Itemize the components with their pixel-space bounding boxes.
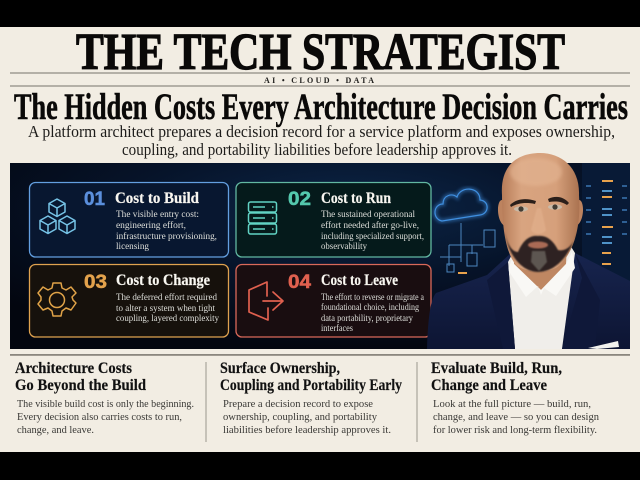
card title: Cost to Run (321, 190, 391, 207)
card text: foundational choice, including (321, 302, 419, 313)
network diagram (440, 223, 495, 272)
card title: Cost to Build (115, 190, 199, 207)
number 02: 02 (288, 189, 311, 210)
card text: licensing (116, 242, 149, 252)
ears (498, 200, 583, 226)
card: cost to run (236, 182, 431, 257)
server racks (458, 163, 630, 288)
card text: The sustained operational (321, 210, 415, 220)
masthead (10, 24, 630, 86)
card text: The visible entry cost: (116, 210, 199, 220)
suit jacket (427, 253, 630, 349)
card text: data portability, proprietary (321, 314, 413, 324)
icon: cubes (40, 199, 75, 234)
scalp highlight (510, 158, 562, 186)
pocket square (588, 341, 619, 349)
card text: infrastructure provisioning, (116, 231, 217, 242)
rule under panel (10, 354, 630, 356)
column heading: Go Beyond the Build (15, 377, 146, 394)
card text: effort needed after go-live, (321, 220, 419, 231)
column text: liabilities before leadership approves it. (223, 424, 391, 436)
column heading: Architecture Costs (15, 360, 132, 377)
card text (116, 210, 217, 252)
subtitle: A platform architect prepares a decision record for a service platform and exposes ownership, (28, 122, 615, 141)
column heading: Coupling and Portability Early (220, 377, 402, 394)
card text: engineering effort, (116, 220, 186, 231)
shirt collar (508, 252, 575, 297)
head (502, 153, 579, 272)
card text: to alter a system when tight (116, 304, 215, 314)
card text: interfaces (321, 323, 353, 334)
card text: The effort to reverse or migrate a (321, 292, 425, 303)
column text: Look at the full picture — build, run, (433, 398, 591, 410)
portrait: bald bearded man in navy suit (427, 153, 630, 349)
subtitle: coupling, and portability liabilities before leadership approves it. (122, 140, 512, 159)
card text: observability (321, 242, 367, 252)
column text: Prepare a decision record to expose (223, 398, 373, 410)
card: cost to build (30, 182, 228, 257)
icon: exit arrow (249, 282, 283, 320)
card text (116, 292, 219, 324)
icon: glowing cloud (435, 189, 487, 221)
panel: dark technology background (10, 163, 630, 349)
chin grey patch (531, 251, 547, 271)
subtitle (28, 122, 615, 159)
beard (505, 232, 577, 272)
eyes (514, 204, 562, 212)
white shirt (508, 245, 575, 349)
nose (532, 208, 545, 233)
card title: Cost to Leave (321, 272, 398, 289)
eyebrows (510, 197, 569, 207)
number 04: 04 (288, 272, 311, 293)
number 03: 03 (84, 272, 107, 293)
card title: Cost to Change (116, 272, 210, 289)
column: evaluate (431, 360, 599, 436)
column: architecture costs (15, 360, 194, 436)
card text: coupling, layered complexity (116, 314, 219, 324)
column heading: Change and Leave (431, 377, 547, 394)
column text: The visible build cost is only the beginning. (17, 398, 194, 410)
card: cost to change (30, 264, 228, 337)
column text (17, 398, 194, 436)
column heading: Surface Ownership, (220, 360, 340, 377)
card text: including specialized support, (321, 232, 424, 242)
neck (514, 257, 566, 290)
icon: server stack (248, 202, 276, 234)
column heading (220, 360, 402, 394)
column text: for lower risk and long-term flexibility. (433, 424, 597, 436)
column text (433, 398, 599, 436)
mouth (528, 242, 548, 248)
column text: change, and leave. (17, 424, 94, 436)
card text: The deferred effort required (116, 292, 217, 303)
column text: ownership, coupling, and portability (223, 411, 377, 423)
section tagline: AI • CLOUD • DATA (264, 76, 374, 85)
card text (321, 210, 424, 252)
column: surface ownership (220, 360, 402, 436)
column text: change, and leave — so you can design (433, 411, 599, 423)
column text (223, 398, 391, 436)
column heading (15, 360, 146, 394)
number 01: 01 (84, 189, 105, 210)
column text: Every decision also carries costs to run, (17, 411, 182, 423)
icon: gear (38, 283, 76, 316)
column heading: Evaluate Build, Run, (431, 360, 562, 377)
jacket lapels (487, 253, 600, 349)
card: cost to leave (236, 264, 431, 337)
column heading (431, 360, 562, 394)
card text (321, 292, 425, 334)
